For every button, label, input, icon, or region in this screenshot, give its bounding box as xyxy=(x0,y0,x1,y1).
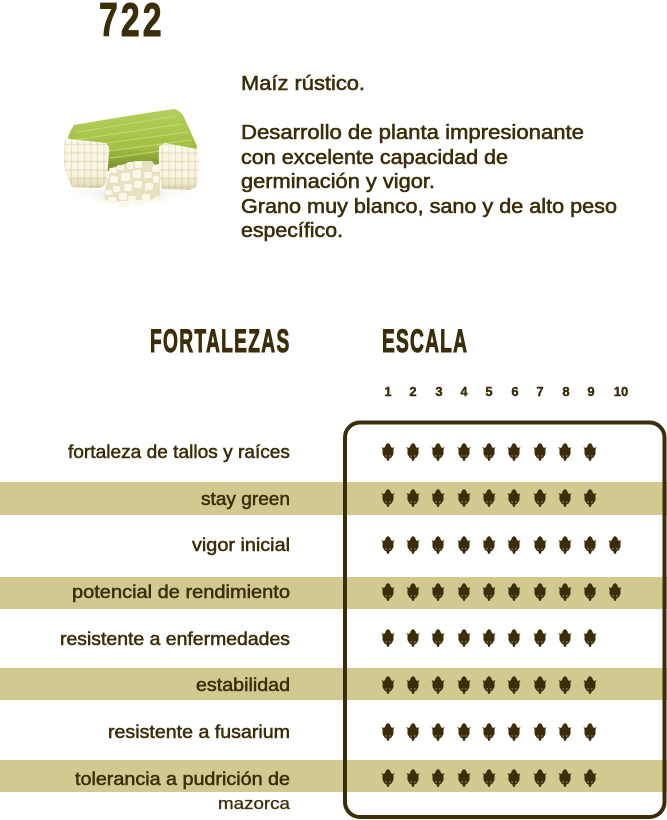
row: resistente a enfermedades: resistente a enfermedades xyxy=(60,629,290,649)
scale numbers: 6 xyxy=(511,384,519,399)
scale numbers: 3 xyxy=(435,384,443,399)
description text: Desarrollo de planta impresionante xyxy=(241,122,584,144)
scale numbers: 2 xyxy=(409,384,417,399)
row: potencial de rendimiento xyxy=(72,582,622,602)
scale numbers: 5 xyxy=(485,384,493,399)
heading: fortalezas: FORTALEZAS xyxy=(150,323,289,359)
description text: Maíz rústico. xyxy=(241,73,365,95)
scale numbers: 1 xyxy=(384,384,392,399)
row: vigor inicial: vigor inicial xyxy=(192,535,290,555)
description text: específico. xyxy=(241,220,343,242)
scale numbers: 7 xyxy=(536,384,544,399)
heading: escala: ESCALA xyxy=(382,323,467,359)
row: potencial de rendimiento: potencial de rendimiento xyxy=(72,582,290,602)
description text xyxy=(241,73,617,242)
row: resistente a fusarium xyxy=(108,722,596,742)
description text: Grano muy blanco, sano y de alto peso xyxy=(241,196,617,218)
description text: germinación y vigor. xyxy=(241,171,435,193)
row: resistente a fusarium: resistente a fusarium xyxy=(108,722,290,742)
scale numbers: 9 xyxy=(587,384,595,399)
description text: con excelente capacidad de xyxy=(241,147,508,169)
row: fortaleza de tallos y raíces xyxy=(68,442,596,462)
row: estabilidad: estabilidad xyxy=(196,675,290,695)
row: tolerancia a pudrición de mazorca xyxy=(75,769,596,813)
row: stay green: stay green xyxy=(201,489,290,509)
scale numbers: 10 xyxy=(614,384,628,399)
row: tolerancia a pudrición de mazorca: mazorca xyxy=(218,794,291,813)
row: stay green xyxy=(201,489,596,509)
image: corn cobs and kernels xyxy=(59,109,203,207)
row: vigor inicial xyxy=(192,535,622,555)
scale numbers: 4 xyxy=(460,384,468,399)
row: tolerancia a pudrición de mazorca: tolerancia a pudrición de xyxy=(75,769,290,789)
row: estabilidad xyxy=(196,675,596,695)
scale frame xyxy=(345,422,664,817)
scale numbers: 8 xyxy=(562,384,570,399)
row: resistente a enfermedades xyxy=(60,629,596,649)
scale numbers xyxy=(384,384,628,399)
row bands xyxy=(0,482,667,792)
row: fortaleza de tallos y raíces: fortaleza de tallos y raíces xyxy=(68,442,290,462)
